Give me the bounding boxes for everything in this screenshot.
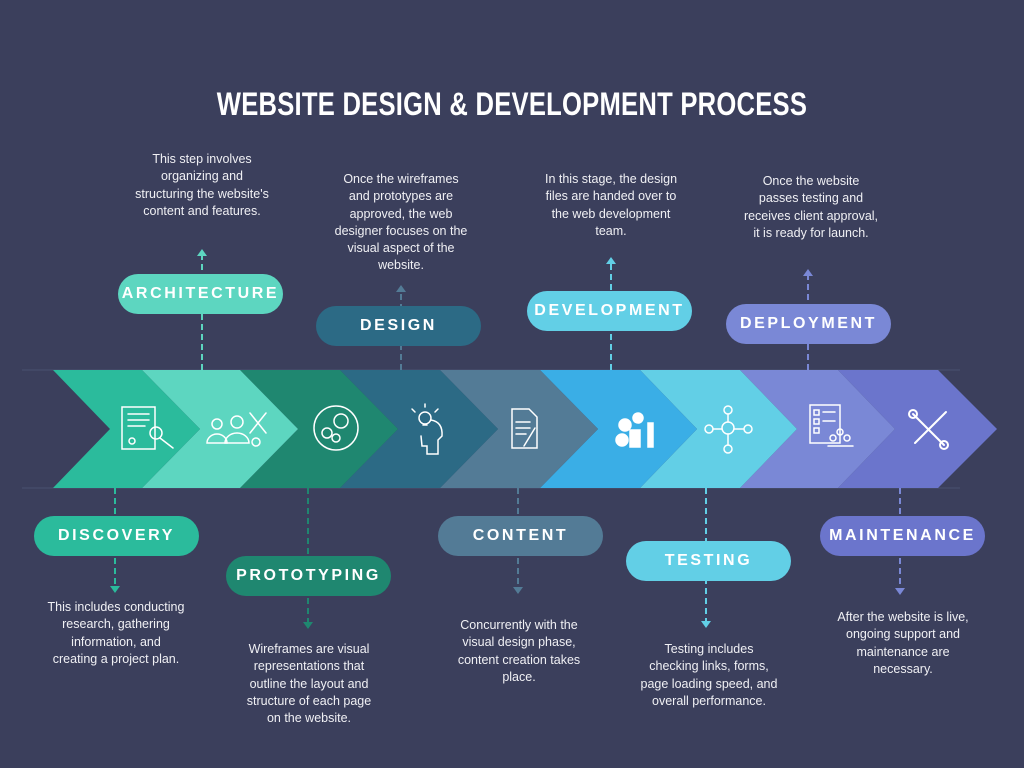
pill: content xyxy=(438,516,603,556)
text: discovery: creating a project plan. xyxy=(53,652,179,666)
pill: content: CONTENT xyxy=(473,527,568,544)
text: development: files are handed over to xyxy=(546,189,676,203)
text: deployment: receives client approval, xyxy=(744,209,878,223)
text: design: designer focuses on the xyxy=(335,224,467,238)
pill: architecture: ARCHITECTURE xyxy=(122,285,279,302)
text: testing xyxy=(641,642,777,708)
pill: development: DEVELOPMENT xyxy=(534,302,685,319)
text: prototyping: structure of each page xyxy=(247,694,371,708)
icon: idea head xyxy=(412,404,442,454)
text: deployment: it is ready for launch. xyxy=(753,226,869,240)
icon: gears idea xyxy=(616,413,653,447)
icon: network xyxy=(705,406,752,453)
text: architecture: content and features. xyxy=(143,204,261,218)
text: architecture xyxy=(135,152,269,218)
text: content: place. xyxy=(502,670,536,684)
icon: wrench screwdriver xyxy=(909,410,948,449)
text: design: visual aspect of the xyxy=(347,241,454,255)
text: content: Concurrently with the xyxy=(460,618,578,632)
connectors xyxy=(115,254,900,624)
pill: deployment: DEPLOYMENT xyxy=(740,315,877,332)
pill: maintenance: MAINTENANCE xyxy=(829,527,976,544)
text: discovery: research, gathering xyxy=(62,617,170,631)
pill: discovery xyxy=(34,516,199,556)
text: testing: page loading speed, and xyxy=(641,677,777,691)
text: prototyping: Wireframes are visual xyxy=(249,642,369,656)
pill: discovery: DISCOVERY xyxy=(58,527,175,544)
icon: document pen xyxy=(512,409,537,448)
icon: checklist team xyxy=(810,405,853,446)
text: architecture: structuring the website's xyxy=(135,187,269,201)
text: deployment: Once the website xyxy=(763,174,859,188)
text: architecture: This step involves xyxy=(152,152,252,166)
icon: gears circle xyxy=(314,406,358,450)
text: development: team. xyxy=(595,224,627,238)
text: content xyxy=(458,618,580,684)
pill: prototyping xyxy=(226,556,391,596)
text: maintenance: After the website is live, xyxy=(837,610,969,624)
text: development xyxy=(545,172,677,238)
text: design xyxy=(335,172,467,272)
pill: deployment xyxy=(726,304,891,344)
icon: people tools xyxy=(207,413,266,446)
text: development: the web development xyxy=(552,207,670,221)
text: prototyping: on the website. xyxy=(267,711,351,725)
text: content: visual design phase, xyxy=(462,635,576,649)
text: design: and prototypes are xyxy=(349,189,453,203)
icon: discovery document xyxy=(122,407,173,449)
pill: architecture xyxy=(118,274,283,314)
text: prototyping: representations that xyxy=(254,659,364,673)
text: testing: overall performance. xyxy=(652,694,766,708)
text: development: In this stage, the design xyxy=(545,172,677,186)
text: content: content creation takes xyxy=(458,653,580,667)
pill: prototyping: PROTOTYPING xyxy=(236,567,381,584)
text: deployment xyxy=(744,174,878,240)
pill: testing xyxy=(626,541,791,581)
text: prototyping: outline the layout and xyxy=(250,677,368,691)
text: maintenance xyxy=(837,610,969,676)
text: architecture: organizing and xyxy=(161,169,243,183)
icons xyxy=(122,404,948,454)
text: maintenance: ongoing support and xyxy=(846,627,960,641)
text: discovery: This includes conducting xyxy=(48,600,184,614)
text: deployment: passes testing and xyxy=(759,191,863,205)
text: maintenance: maintenance are xyxy=(856,645,950,659)
text: discovery xyxy=(48,600,184,666)
title: WEBSITE DESIGN & DEVELOPMENT PROCESS xyxy=(217,86,807,122)
text: discovery: information, and xyxy=(71,635,161,649)
text: maintenance: necessary. xyxy=(873,662,933,676)
pill: design: DESIGN xyxy=(360,317,437,334)
text: design: Once the wireframes xyxy=(343,172,459,186)
pill: development xyxy=(527,291,692,331)
text: design: website. xyxy=(378,258,424,272)
pill: testing: TESTING xyxy=(665,552,752,569)
pill: maintenance xyxy=(820,516,985,556)
pill: design xyxy=(316,306,481,346)
chevron band xyxy=(22,370,997,488)
text: testing: Testing includes xyxy=(665,642,753,656)
text: design: approved, the web xyxy=(350,207,452,221)
text: testing: checking links, forms, xyxy=(649,659,769,673)
text: prototyping xyxy=(247,642,371,725)
